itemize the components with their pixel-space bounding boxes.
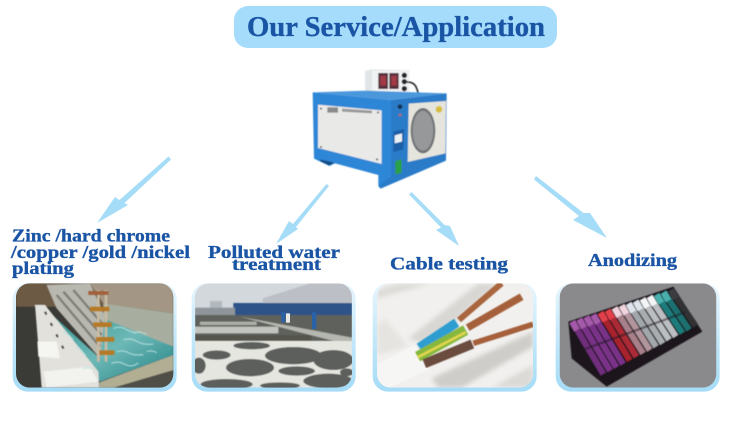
arrow: to water treatment xyxy=(276,184,329,244)
water ripples xyxy=(63,327,157,368)
label: polluted water treatment: treatment xyxy=(232,254,321,274)
dark shadow band xyxy=(585,312,685,349)
title: Our Service/Application xyxy=(247,11,545,43)
photo: wastewater tank xyxy=(192,283,356,392)
label: polluted water treatment: Polluted water xyxy=(208,242,340,262)
anode hangers xyxy=(88,290,114,362)
cabinet body xyxy=(313,91,447,189)
label: polluted water treatment xyxy=(208,242,340,274)
workers xyxy=(281,312,316,329)
arrow: to plating xyxy=(97,156,171,223)
arrow: to anodizing xyxy=(534,176,607,238)
label: plating xyxy=(10,226,190,278)
rectifier machine xyxy=(313,69,447,189)
label: plating: /copper /gold /nickel xyxy=(10,242,190,262)
label: plating: plating xyxy=(12,258,74,278)
label: anodizing: Anodizing xyxy=(588,250,677,270)
label: plating: Zinc /hard chrome xyxy=(12,226,170,246)
sample strips xyxy=(572,290,696,374)
strip highlights xyxy=(572,290,676,330)
arrow: to cable testing xyxy=(409,192,459,246)
label: cable testing: Cable testing xyxy=(390,254,508,274)
fan grille xyxy=(408,101,446,162)
photo: electroplating tank xyxy=(13,283,177,392)
photo: cable xyxy=(373,283,537,392)
front label panel xyxy=(318,105,382,164)
photo: anodized aluminium samples xyxy=(556,283,720,392)
side controls xyxy=(393,104,404,175)
control box xyxy=(365,69,418,94)
